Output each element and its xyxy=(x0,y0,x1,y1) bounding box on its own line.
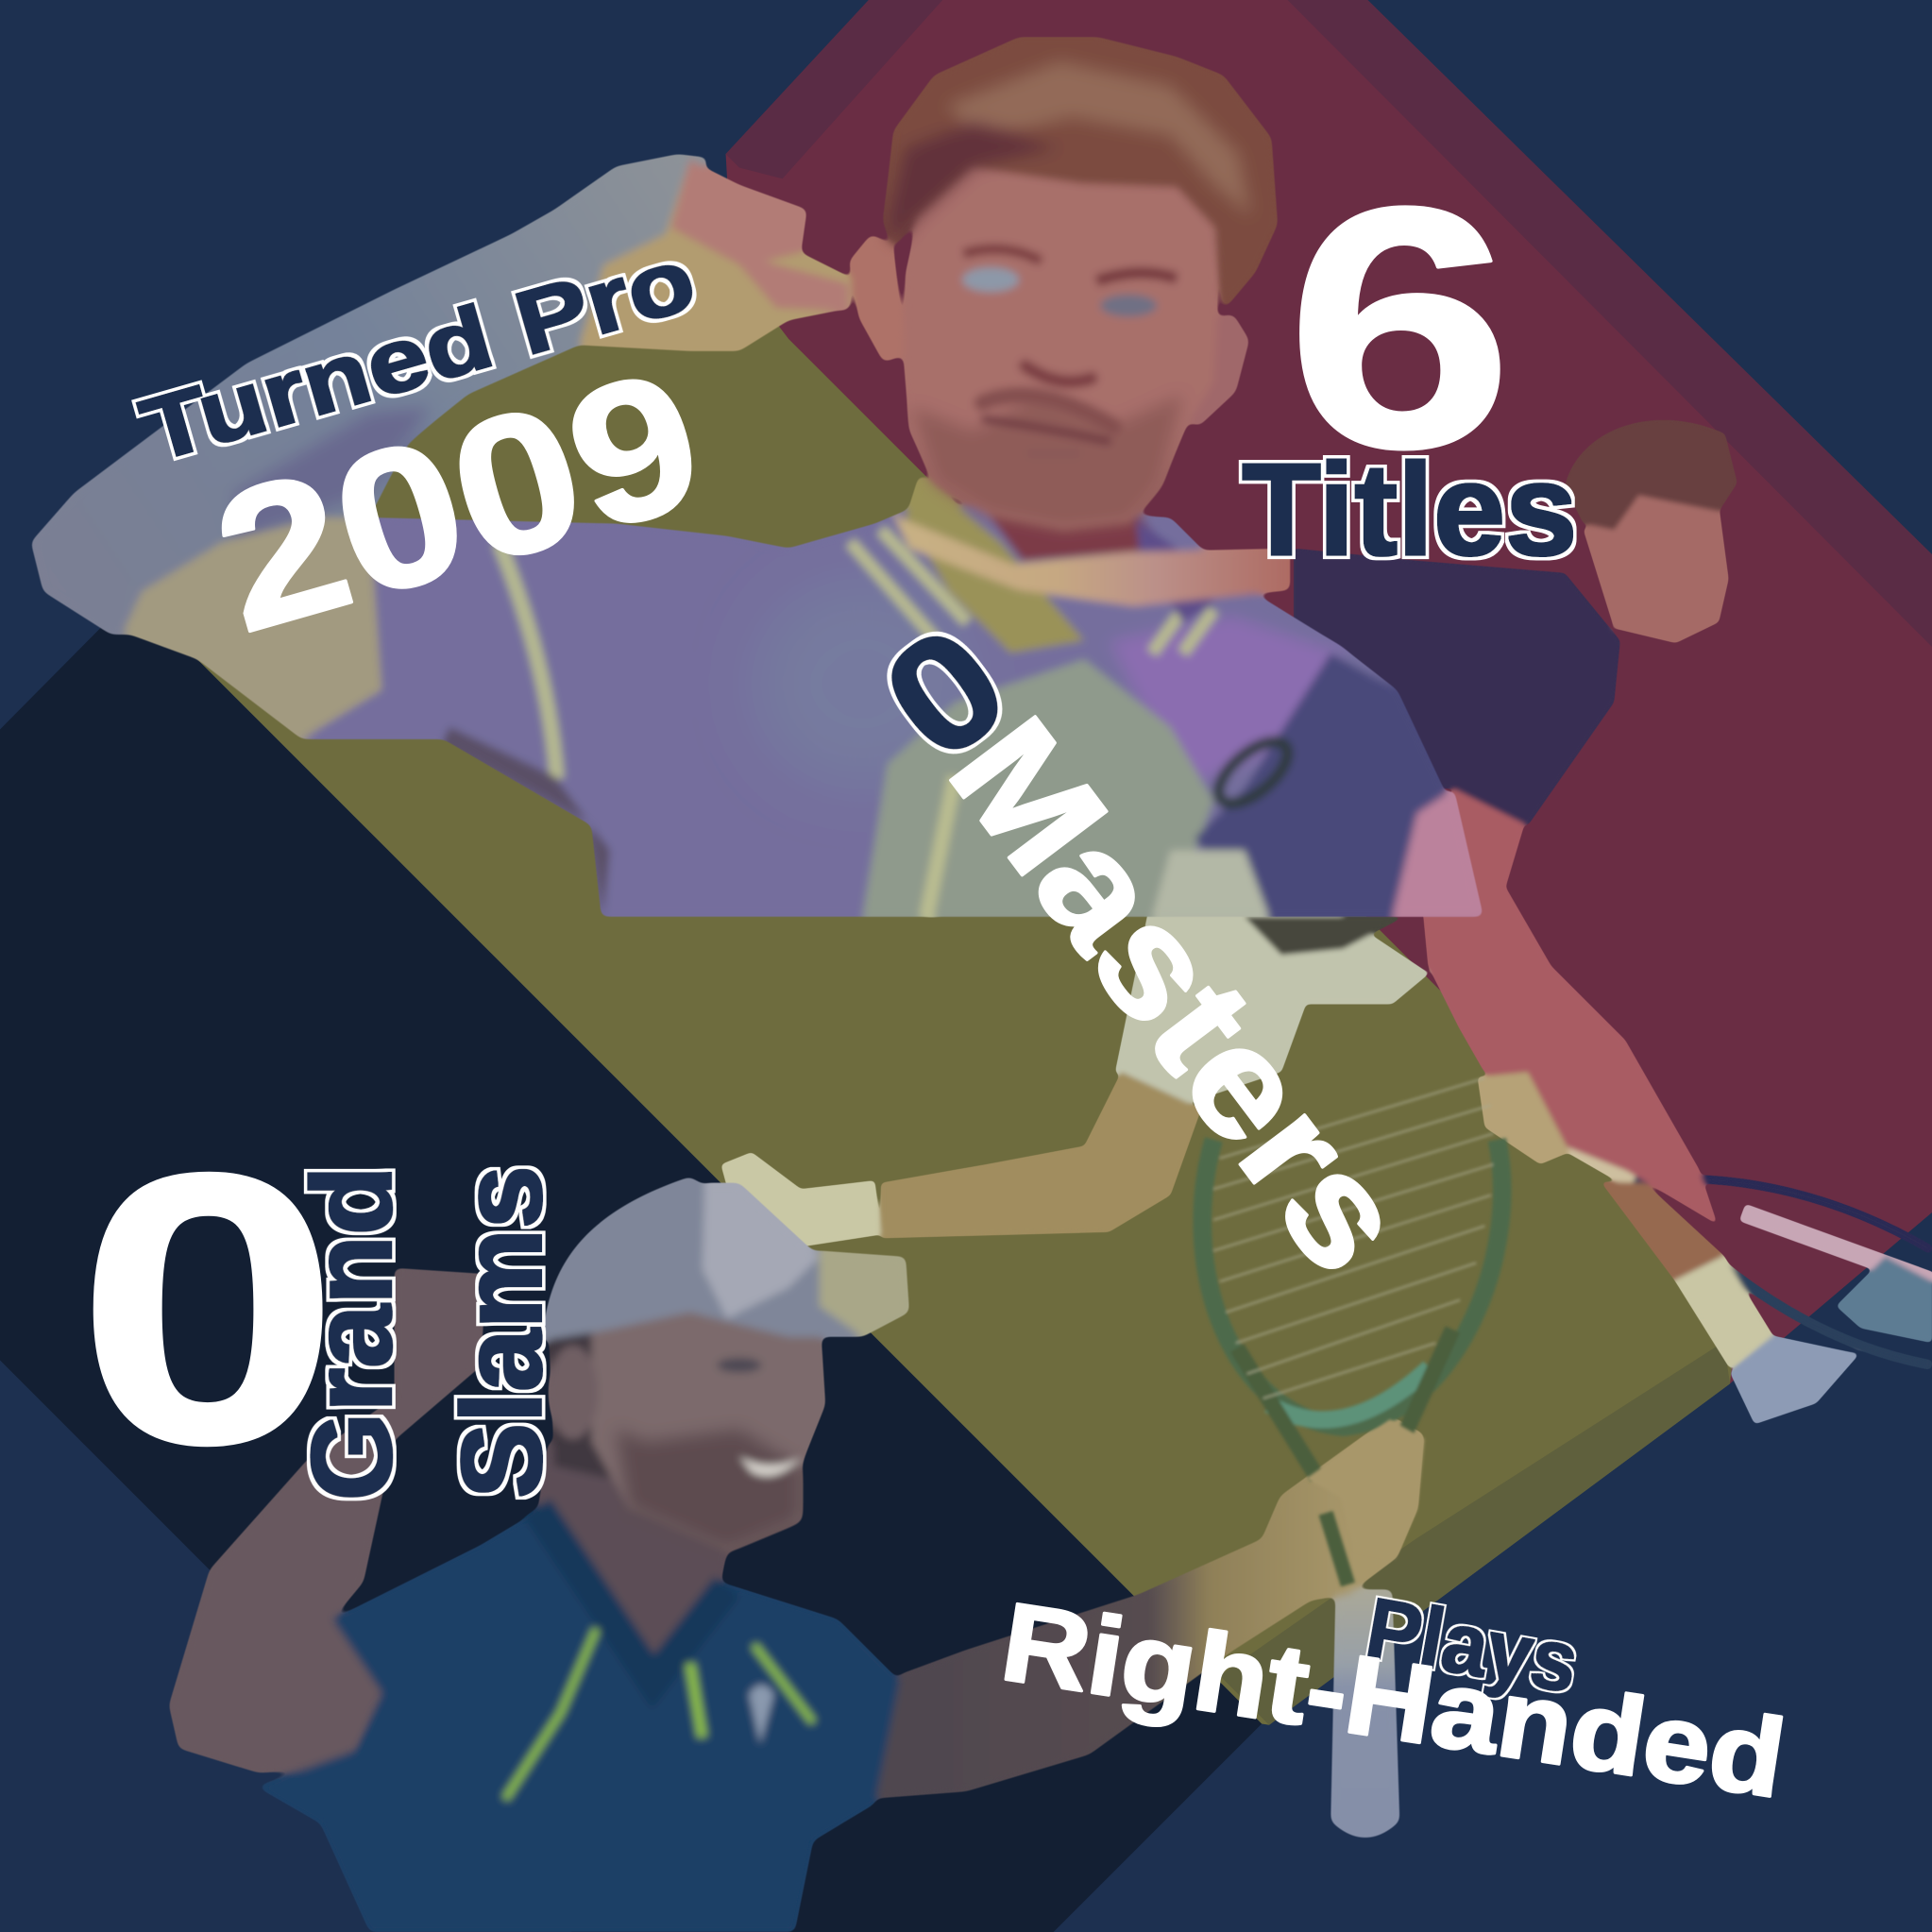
serving player racket xyxy=(1569,1144,1932,1365)
see-through shorts xyxy=(1152,850,1269,917)
eyes xyxy=(962,249,1177,316)
face xyxy=(591,1306,825,1551)
see-through dark shirt xyxy=(1195,653,1483,917)
cap brim olive tint xyxy=(820,1250,909,1337)
neck xyxy=(986,512,1171,561)
beard xyxy=(912,395,1183,530)
serving player legs and sock xyxy=(1601,1181,1859,1424)
diagonal band: olive xyxy=(194,210,1739,1725)
left ear xyxy=(849,234,906,363)
extended right arm and hand xyxy=(869,1415,1424,1799)
nose shadow xyxy=(1025,366,1092,381)
stat: grand label: Grand xyxy=(289,1165,415,1500)
yellow neck triangle xyxy=(906,474,1084,653)
stat: 0 grand slams number: 0 xyxy=(76,1094,340,1524)
see-through arm across neck xyxy=(893,515,1290,606)
serving player shorts xyxy=(1115,850,1430,1109)
racket logo ring xyxy=(1209,731,1297,815)
ear xyxy=(549,1346,598,1439)
fingers xyxy=(671,161,848,311)
serving player head xyxy=(1565,420,1737,643)
beard xyxy=(616,1430,801,1551)
stat: titles label: Titles xyxy=(1242,437,1577,583)
green racket xyxy=(1202,1078,1502,1478)
hair shadow xyxy=(887,123,1059,244)
yellow placket xyxy=(926,776,955,917)
shirt xyxy=(302,505,1483,917)
racket-gripping fingers xyxy=(1306,1419,1424,1585)
diagonal band: maroon xyxy=(726,0,1932,1383)
hair xyxy=(549,1306,616,1479)
hair xyxy=(884,37,1278,311)
stat: turned pro label: Turned Pro xyxy=(130,228,705,481)
smile xyxy=(739,1456,801,1476)
racket butt and grip xyxy=(1330,1589,1399,1838)
sleeve seam stripe xyxy=(499,542,557,779)
photo: serving player xyxy=(720,420,1932,1424)
stat: slams label: Slams xyxy=(439,1165,566,1499)
collar purple xyxy=(1136,518,1213,622)
forearm sleeve xyxy=(31,154,708,635)
photo: top portrait player xyxy=(31,37,1483,917)
stat: 0 masters number: 0 xyxy=(852,591,1038,793)
see-through pink arm xyxy=(1392,788,1483,917)
stat: right-handed: Right-Handed xyxy=(994,1579,1792,1821)
hair highlight xyxy=(949,61,1250,215)
cap xyxy=(542,1177,909,1341)
shirt centre green gleam xyxy=(862,659,1213,917)
sleeve folds xyxy=(234,407,432,542)
moustache and mouth xyxy=(982,395,1114,453)
face xyxy=(903,167,1217,530)
shirt blue shading xyxy=(752,579,974,788)
bright purple chest highlight xyxy=(1109,616,1342,788)
serving player arm xyxy=(1417,788,1718,1225)
stat: 6: 6 xyxy=(1286,136,1513,518)
hand xyxy=(579,161,850,351)
collar stripes xyxy=(850,530,1213,653)
raised left arm xyxy=(169,1268,486,1773)
shirt xyxy=(256,1508,900,1932)
stat: 2009: 2009 xyxy=(194,329,723,674)
eye xyxy=(717,1358,761,1373)
collar and shirt trim xyxy=(505,1508,813,1799)
stat: plays label: Plays xyxy=(1360,1580,1585,1711)
shirt logo xyxy=(749,1685,773,1743)
elbow skin xyxy=(123,517,382,739)
stat: masters label: Masters xyxy=(918,687,1441,1303)
racket grip hand xyxy=(1478,1072,1569,1164)
serving player shirt xyxy=(1294,549,1620,825)
shorts shadow xyxy=(1245,917,1405,955)
diagonal band: dark navy xyxy=(0,595,1262,1932)
right ear xyxy=(1183,314,1249,426)
glove over cap xyxy=(703,1183,820,1318)
serving player left arm and wristband xyxy=(720,1072,1201,1247)
photo: celebrating player xyxy=(169,1177,1424,1932)
neck xyxy=(537,1442,727,1657)
underarm shadow xyxy=(444,727,610,917)
